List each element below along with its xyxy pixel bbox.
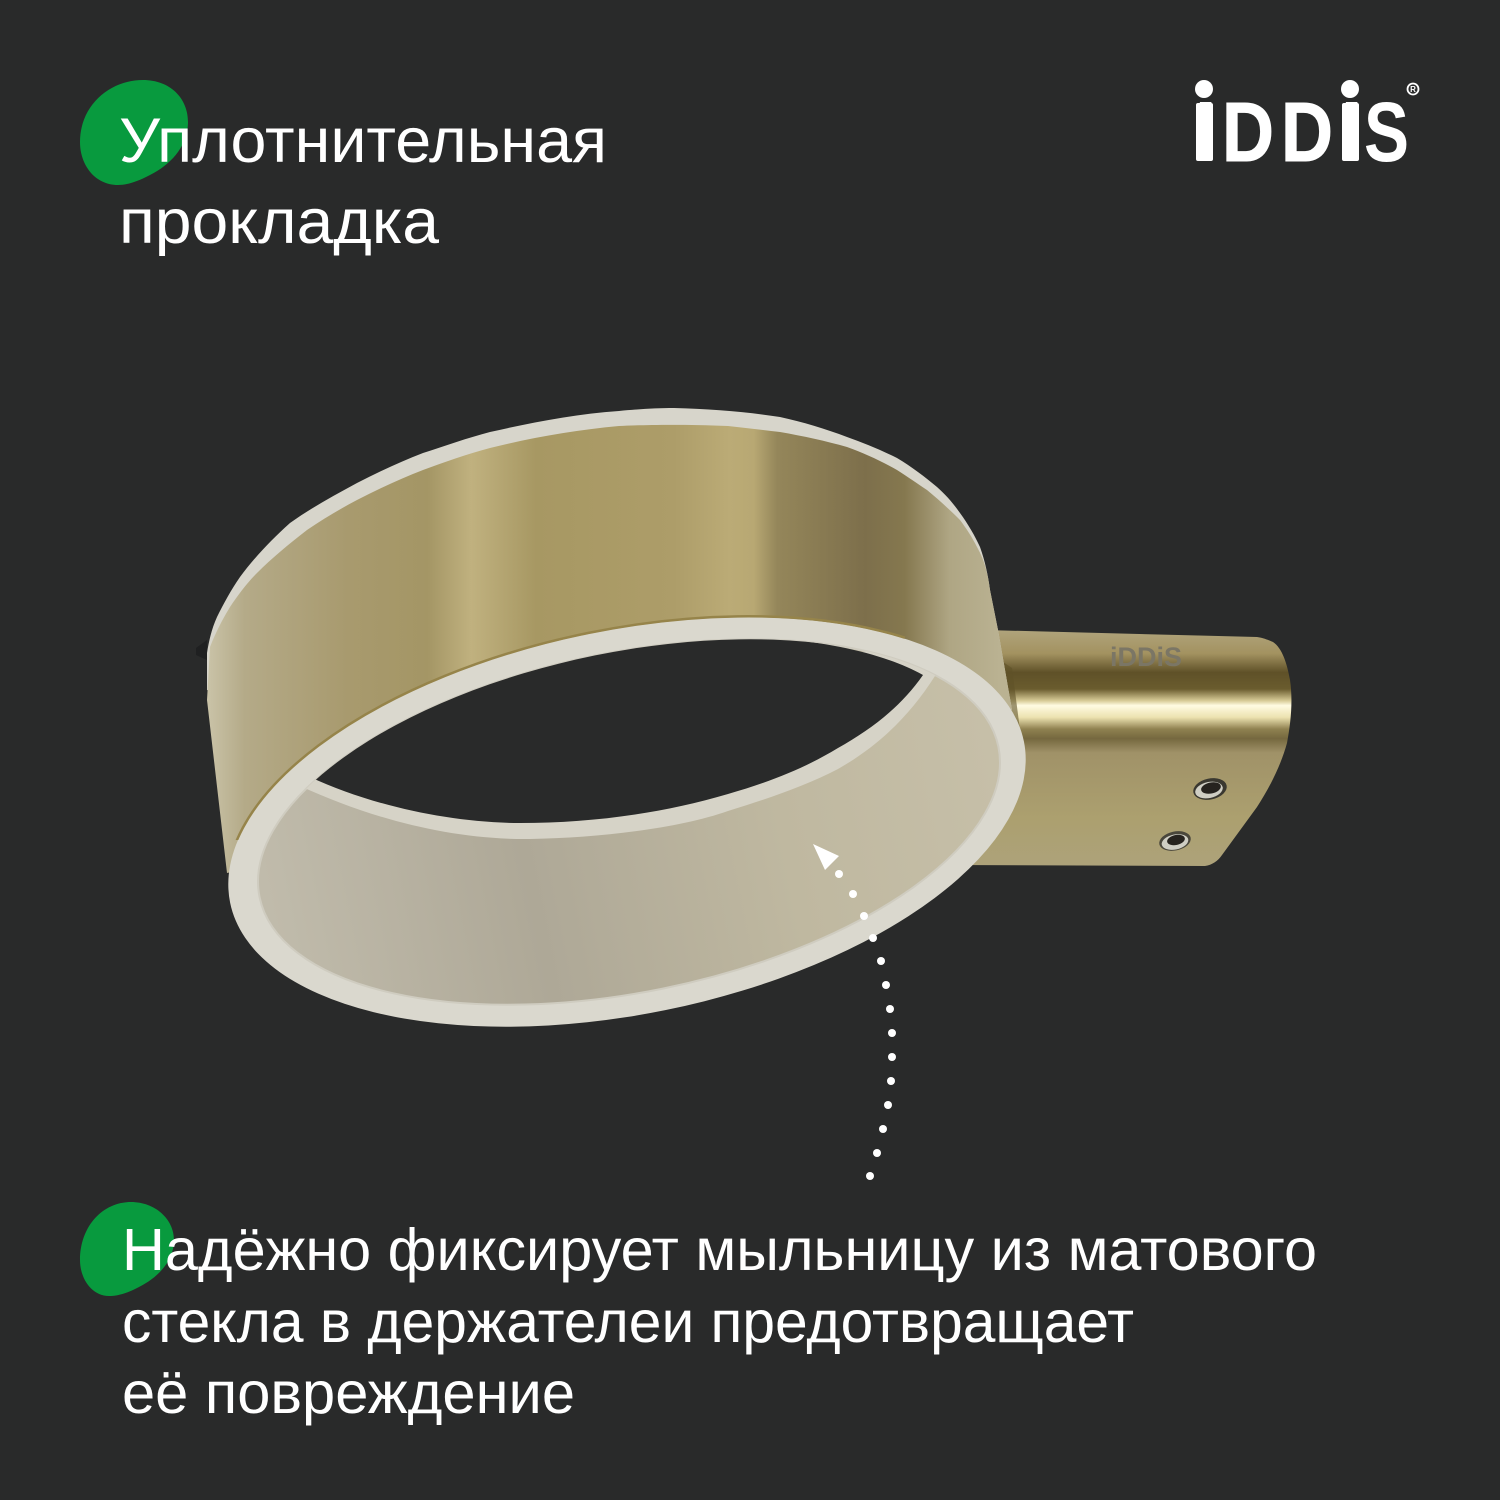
description text: стекла в держателеи предотвращает bbox=[122, 1289, 1134, 1355]
title with green blob bbox=[80, 80, 607, 257]
icon: green blob bbox=[80, 1202, 174, 1296]
opening bbox=[310, 636, 923, 823]
logo: IDDIS: i bbox=[1340, 85, 1363, 179]
logo: IDDIS: S bbox=[1364, 85, 1409, 179]
logo: IDDIS bbox=[1190, 76, 1418, 179]
description text bbox=[122, 1217, 1317, 1426]
description text: Надёжно фиксирует мыльницу из матового bbox=[122, 1217, 1317, 1283]
rivet bbox=[1191, 775, 1229, 803]
logo: IDDIS: i bbox=[1194, 85, 1217, 179]
brass ring outer surface bbox=[207, 425, 1012, 873]
title text bbox=[119, 106, 607, 257]
logo: IDDIS: D bbox=[1281, 85, 1333, 179]
title text: Уплотнительная bbox=[119, 106, 607, 176]
cylinder shadow at ring junction bbox=[1000, 660, 1020, 730]
dotted arrow bbox=[813, 844, 896, 1180]
product: soap holder ring with gasket bbox=[191, 408, 1291, 1092]
mount bracket bbox=[950, 630, 1291, 866]
title text: прокладка bbox=[119, 187, 440, 257]
gasket inner surface bbox=[226, 580, 1032, 1064]
rivet bbox=[1157, 828, 1193, 854]
opening with back rim band bbox=[300, 636, 935, 839]
back rim band bbox=[300, 640, 935, 839]
rim top highlight bbox=[236, 615, 906, 840]
engraved logo: iDDiS bbox=[1110, 642, 1182, 672]
small dark tail bbox=[196, 640, 207, 660]
icon: green blob bbox=[80, 80, 188, 185]
logo: IDDIS: D bbox=[1222, 85, 1274, 179]
front gasket rim bbox=[192, 553, 1062, 1091]
description text: её повреждение bbox=[122, 1360, 575, 1426]
back gasket rim bbox=[207, 408, 1012, 800]
description with green blob bbox=[80, 1202, 1317, 1426]
logo: IDDIS: R bbox=[1410, 85, 1416, 94]
